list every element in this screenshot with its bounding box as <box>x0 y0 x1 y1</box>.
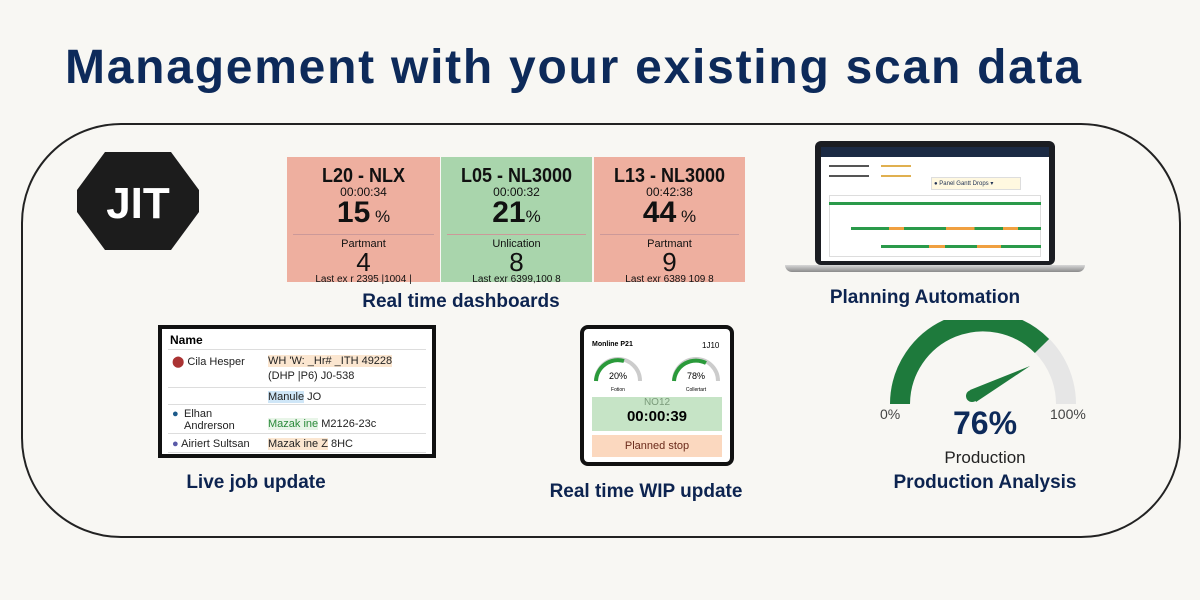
panel: live job update list: Manule JO <box>268 391 321 403</box>
card L13: 00:42:38 <box>646 185 693 199</box>
panel: live job update list: (DHP |P6) J0-538 <box>268 370 354 382</box>
card L20: 00:00:34 <box>340 185 387 199</box>
icon: JIT logo <box>77 152 199 250</box>
chart: production gauge: 0% <box>880 406 900 422</box>
card L05 <box>441 157 592 282</box>
panel: live job update list: ● <box>172 408 179 420</box>
value: 76%: 76% <box>953 405 1017 441</box>
panel: live job update list: Mazak ine M2126-23c <box>268 418 376 430</box>
text: production: Production <box>944 448 1026 467</box>
card L05: 8 <box>509 247 524 277</box>
label: production analysis: Production Analysis <box>894 472 1076 493</box>
title: Management with your existing scan data <box>65 41 1083 94</box>
label: planning automation: Planning Automation <box>830 287 1020 308</box>
main frame <box>21 123 1181 538</box>
panel: live job update list <box>158 325 436 458</box>
panel: live job update list: WH 'W: _Hr# _ITH 49228 <box>268 355 392 367</box>
chart: production gauge <box>880 320 1086 422</box>
chart: production gauge: 100% <box>1050 406 1086 422</box>
card L13: Last exr 6389 109 8 <box>625 274 714 285</box>
panel: live job update list: ⬤ Cila Hesper <box>172 356 245 368</box>
panel: live job update list: ● Airiert Sultsan <box>172 438 250 450</box>
icon: JIT logo: JIT <box>106 179 170 228</box>
card L05: Unlication <box>492 238 541 250</box>
panel: real time dashboards <box>287 157 745 285</box>
label: live job update: Live job update <box>186 472 326 493</box>
card L20 <box>287 157 440 282</box>
card L20: 4 <box>356 247 371 277</box>
panel: live job update list: Andrerson <box>184 420 235 432</box>
card L20: Partmant <box>341 238 386 250</box>
card L13: Partmant <box>647 238 692 250</box>
panel: WIP phone: 00:00:39 <box>627 408 687 425</box>
card L13: L13 - NL3000 <box>614 165 725 187</box>
label: real time dashboards: Real time dashboards <box>362 291 560 312</box>
card L05: L05 - NL3000 <box>461 165 572 187</box>
laptop: planning automation <box>785 141 1085 272</box>
card L20: Last ex r 2395 |1004 | <box>315 274 412 285</box>
panel: live job update list: Mazak ine Z 8HC <box>268 438 353 450</box>
card L05: 00:00:32 <box>493 185 540 199</box>
panel: WIP phone: 78% <box>687 371 705 381</box>
card L13 <box>594 157 745 282</box>
panel: WIP phone <box>580 325 734 466</box>
panel: live job update list: Elhan <box>184 408 212 420</box>
card L13: 44 % <box>643 196 696 229</box>
card L13: 9 <box>662 247 677 277</box>
panel: WIP phone: 20% <box>609 371 627 381</box>
laptop: planning automation: ● Panel Gantt Drops ▾ <box>934 181 993 187</box>
card L05: Last exr 6399,100 8 <box>472 274 561 285</box>
panel: WIP phone: 1J10 <box>702 341 719 350</box>
card L20: 15 % <box>337 196 390 229</box>
panel: live job update list: Name <box>170 333 203 347</box>
label: real time WIP update: Real time WIP update <box>550 481 742 502</box>
card L20: L20 - NLX <box>322 165 405 187</box>
panel: WIP phone: Collertart <box>686 387 707 393</box>
panel: WIP phone: Monline P21 <box>592 341 633 348</box>
card L05: 21% <box>492 196 541 229</box>
panel: WIP phone: NO12 <box>644 397 670 408</box>
panel: WIP phone: Planned stop <box>625 440 689 452</box>
panel: WIP phone: Fotion <box>611 387 625 393</box>
